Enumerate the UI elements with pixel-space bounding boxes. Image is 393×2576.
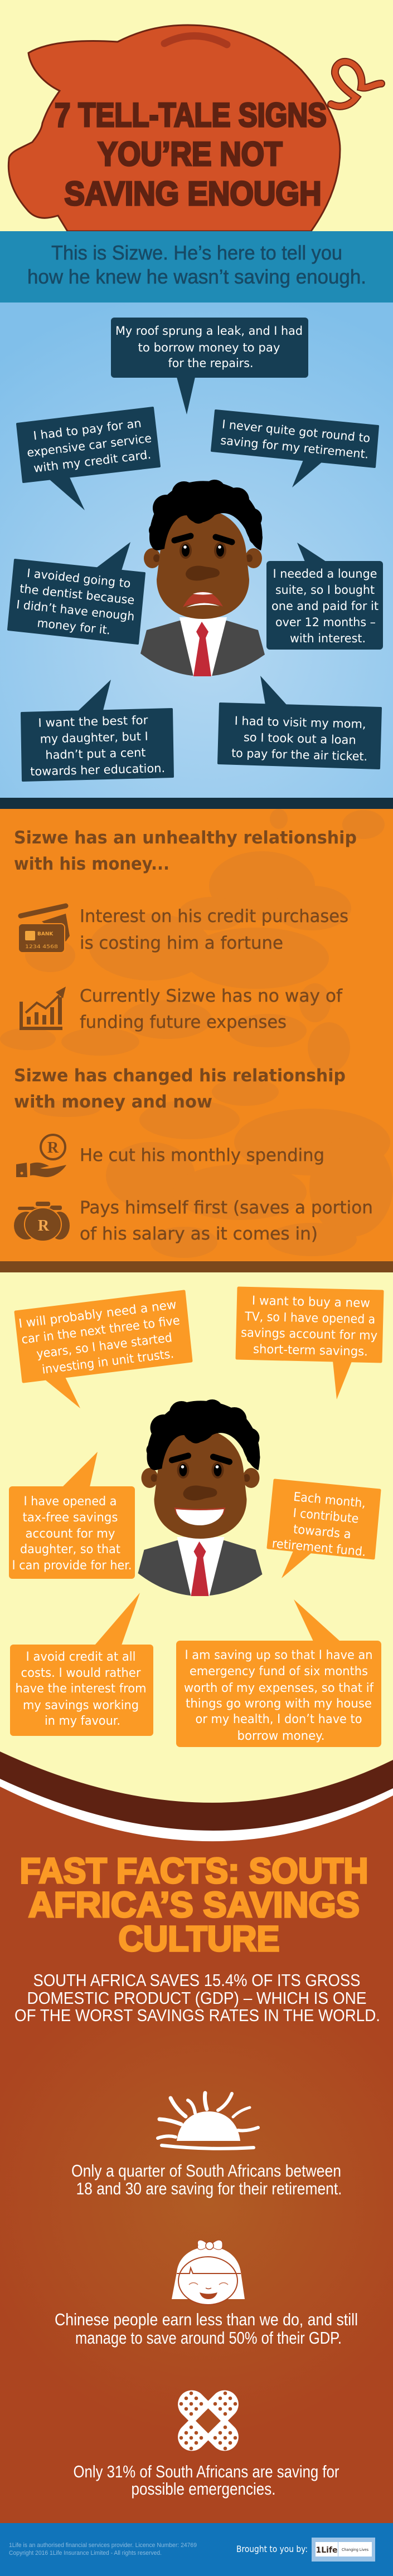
callout: tax-free savings: [9, 1452, 135, 1579]
callout: unit trusts: I will probably need a new: [18, 1298, 177, 1331]
callout: unit trusts: car in the next three to five: [21, 1314, 181, 1347]
callout: air ticket: [219, 676, 381, 768]
text: Chinese people: manage to save around 50% of their GDP.: [75, 2328, 342, 2348]
callout: roof leak: My roof sprung a leak, and I had: [115, 324, 303, 338]
icon: coin in hand: R: [47, 1139, 59, 1157]
header background: [0, 0, 393, 231]
title: SAVING ENOUGH: [65, 175, 321, 212]
text: interest on credit: [80, 906, 348, 953]
callout: tax-free savings: I have opened a: [23, 1495, 117, 1509]
callout: air ticket: I had to visit my mom,: [234, 714, 366, 731]
callout: daughter's education: hadn’t put a cent: [45, 746, 146, 762]
callout: emergency fund: borrow money.: [237, 1729, 324, 1743]
splatter texture: [0, 809, 393, 1258]
callout: retirement fund: towards a: [293, 1523, 352, 1542]
panel: orange money relationship: [0, 809, 393, 1261]
icon: sun: [158, 2093, 258, 2149]
heading: fast facts: [20, 1851, 368, 1959]
text: quarter of South Africans: [71, 2161, 342, 2198]
text: quarter of South Africans: 18 and 30 are saving for their retirement.: [76, 2179, 342, 2198]
callout: air ticket: so I took out a loan: [244, 730, 356, 747]
callout: emergency fund: things go wrong with my house: [186, 1697, 372, 1711]
illustration: happy Sizwe: [138, 1399, 262, 1596]
callout: dentist: money for it.: [36, 616, 111, 637]
icon: credit card: 1234 4568: [25, 944, 58, 950]
callout: retirement fund: [268, 1480, 380, 1578]
callout: lounge suite: one and paid for it: [271, 599, 379, 613]
heading: fast facts: FAST FACTS: SOUTH: [20, 1851, 368, 1891]
icon: rising chart: [20, 987, 66, 1030]
divider strip: [0, 1261, 393, 1272]
callout: unit trusts: [16, 1291, 191, 1408]
icon: piggy bank: [8, 25, 381, 231]
callout: unit trusts: years, so I have started: [36, 1331, 173, 1362]
callout: avoid credit: in my favour.: [45, 1714, 120, 1728]
callout: car service: with my credit card.: [33, 448, 152, 475]
callout: new TV: savings account for my: [241, 1326, 377, 1343]
callout: lounge suite: with interest.: [290, 632, 366, 645]
panel: intro band: [0, 231, 393, 303]
divider strip: [0, 798, 393, 809]
panel: intro band: how he knew he wasn’t saving enough.: [27, 265, 366, 288]
illustration: worried Sizwe: [140, 480, 265, 676]
callout: daughter's education: towards her education.: [30, 762, 165, 778]
callout: emergency fund: or my health, I don’t have to: [195, 1713, 362, 1726]
text: GDP savings statement: SOUTH AFRICA SAVES 15.4% OF ITS GROSS: [33, 1970, 360, 1990]
title: [55, 96, 327, 212]
callout: roof leak: to borrow money to pay: [138, 341, 280, 354]
heading: changed relationship: [14, 1066, 346, 1112]
callout: retirement: [212, 411, 378, 487]
callout: tax-free savings: daughter, so that: [20, 1543, 120, 1557]
icon: credit card: [18, 906, 70, 953]
text: brought to you by: Brought to you by:: [236, 2544, 308, 2554]
callout: lounge suite: I needed a lounge: [273, 567, 377, 580]
callout: lounge suite: [266, 543, 383, 650]
panel: cream savings section: [0, 1272, 393, 1829]
callout: unit trusts: investing in unit trusts.: [41, 1347, 174, 1377]
panel: rust fast facts background: [0, 1752, 393, 2523]
title: 7 TELL-TALE SIGNS: [55, 96, 327, 134]
text: pays himself first: of his salary as it comes in): [80, 1224, 318, 1244]
text: legal: [9, 2542, 197, 2557]
text: interest on credit: is costing him a fortune: [80, 933, 283, 953]
logo: 1Life: 1Life: [316, 2546, 338, 2555]
panel: footer: [0, 2523, 393, 2576]
text: legal: 1Life is an authorised financial services provider. Licence Number: 24769: [9, 2542, 197, 2549]
icon: coin in hand: [16, 1135, 66, 1177]
callout: tax-free savings: account for my: [26, 1527, 115, 1541]
callout: avoid credit: [10, 1593, 153, 1736]
title: YOU’RE NOT: [98, 135, 282, 173]
text: pays himself first: Pays himself first (saves a portion: [80, 1198, 373, 1218]
text: no way of funding: funding future expenses: [80, 1012, 287, 1032]
callout: car service: [17, 408, 159, 510]
text: pays himself first: [80, 1198, 373, 1244]
text: cut spending: He cut his monthly spending: [80, 1145, 324, 1165]
callout: new TV: TV, so I have opened a: [244, 1310, 376, 1327]
callout: dentist: [8, 542, 144, 643]
callout: retirement: saving for my retirement.: [220, 433, 369, 461]
logo: 1Life: Changing Lives: [342, 2548, 368, 2552]
text: GDP savings statement: DOMESTIC PRODUCT (GDP) – WHICH IS ONE: [27, 1988, 367, 2008]
callout: emergency fund: worth of my expenses, so that if: [184, 1681, 374, 1695]
heading: changed relationship: with money and now: [14, 1092, 212, 1112]
callout: new TV: I want to buy a new: [252, 1294, 370, 1310]
callout: roof leak: for the repairs.: [168, 357, 253, 370]
callout: avoid credit: my savings working: [23, 1699, 139, 1713]
icon: crossed bandage: [172, 2384, 244, 2457]
text: interest on credit: Interest on his credit purchases: [80, 906, 348, 926]
callout: daughter's education: my daughter, but I: [40, 730, 148, 746]
heading: unhealthy relationship: with his money...: [14, 854, 169, 874]
callout: car service: I had to pay for an: [32, 417, 142, 442]
callout: emergency fund: emergency fund of six months: [190, 1665, 368, 1679]
callout: new TV: short-term savings.: [253, 1343, 368, 1359]
callout: dentist: the dentist because: [19, 582, 135, 607]
text: Chinese people: [55, 2310, 358, 2348]
callout: avoid credit: I avoid credit at all: [26, 1650, 136, 1664]
callout: lounge suite: suite, so I bought: [275, 583, 375, 597]
text: 31% emergencies: [74, 2462, 339, 2499]
text: no way of funding: [80, 986, 343, 1032]
callout: tax-free savings: tax-free savings: [22, 1511, 118, 1525]
callout: emergency fund: I am saving up so that I have an: [185, 1648, 372, 1662]
callout: retirement fund: I contribute: [293, 1506, 359, 1526]
callout: avoid credit: costs. I would rather: [21, 1666, 141, 1680]
callout: air ticket: to pay for the air ticket.: [231, 747, 367, 763]
callout: emergency fund: [176, 1599, 381, 1747]
text: 31% emergencies: Only 31% of South Africans are saving for: [74, 2462, 339, 2481]
panel: intro band: This is Sizwe. He’s here to tell you: [51, 241, 342, 264]
logo: 1Life: [312, 2538, 375, 2562]
icon: money bags: R: [38, 1217, 50, 1235]
callout: lounge suite: over 12 months –: [275, 616, 376, 629]
icon: girl: [172, 2240, 245, 2305]
heading: unhealthy relationship: [14, 828, 357, 874]
callout: car service: expensive car service: [26, 432, 152, 460]
text: GDP savings statement: [14, 1970, 380, 2025]
callout: daughter's education: [22, 680, 173, 780]
callout: retirement fund: retirement fund.: [271, 1537, 366, 1559]
panel: sky background: [0, 303, 393, 798]
text: 31% emergencies: possible emergencies.: [132, 2479, 275, 2499]
heading: fast facts: AFRICA’S SAVINGS: [28, 1885, 360, 1925]
icon: money bags: [14, 1202, 70, 1241]
text: legal: Copyright 2016 1Life Insurance Limited - All rights reserved.: [9, 2550, 162, 2557]
callout: retirement fund: Each month,: [293, 1490, 366, 1511]
callout: roof leak: [111, 318, 308, 414]
callout: daughter's education: I want the best for: [38, 714, 148, 730]
icon: credit card: BANK: [37, 931, 54, 937]
callout: tax-free savings: I can provide for her.: [12, 1559, 132, 1573]
callout: dentist: I didn’t have enough: [16, 598, 135, 623]
heading: changed relationship: Sizwe has changed his relationship: [14, 1066, 346, 1086]
heading: fast facts: CULTURE: [118, 1919, 280, 1959]
callout: new TV: [237, 1288, 382, 1399]
callout: dentist: I avoided going to: [26, 567, 132, 591]
text: no way of funding: Currently Sizwe has no way of: [80, 986, 343, 1006]
text: quarter of South Africans: Only a quarter of South Africans between: [71, 2161, 341, 2180]
callout: avoid credit: have the interest from: [16, 1682, 146, 1696]
heading: unhealthy relationship: Sizwe has an unhealthy relationship: [14, 828, 357, 848]
callout: retirement: I never quite got round to: [221, 417, 371, 445]
